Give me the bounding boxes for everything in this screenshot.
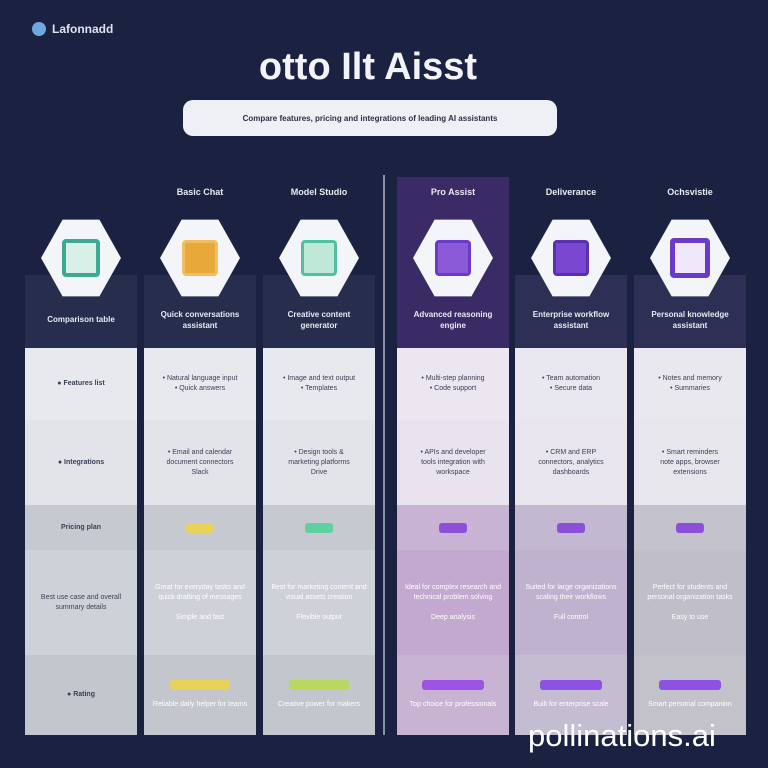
column 2 — [263, 187, 375, 735]
title: otto Ilt Aisst — [259, 46, 477, 88]
column 5 — [634, 187, 746, 735]
text: Comparison table — [47, 315, 115, 324]
column 1 — [144, 187, 256, 735]
text: Pricing plan — [61, 524, 101, 530]
text: Perfect for students and personal organization tasks — [647, 584, 733, 600]
text: • Email and calendar — [168, 448, 232, 456]
text: Easy to use — [672, 614, 708, 620]
text: • CRM and ERP — [546, 448, 596, 456]
text: Suited for large organizations scaling their workflows — [525, 584, 617, 600]
purple header block col3 — [397, 177, 509, 348]
text: • Team automation — [542, 375, 600, 382]
text: Ochsvistie — [667, 187, 713, 197]
text: • Image and text output — [283, 375, 355, 382]
text: ● Features list — [57, 380, 105, 387]
text: Smart personal companion — [648, 701, 732, 708]
text: • Natural language input — [163, 375, 237, 382]
text: Best for marketing content and visual assets creation — [271, 584, 367, 600]
text: Creative power for makers — [278, 701, 360, 708]
text: • Secure data — [550, 385, 592, 392]
text: Built for enterprise scale — [533, 701, 609, 708]
column 4 — [515, 187, 627, 735]
divider — [383, 175, 385, 735]
text: marketing platforms — [288, 458, 350, 466]
text: Simple and fast — [176, 614, 224, 620]
text: dashboards — [553, 468, 589, 476]
text: Creative content generator — [288, 310, 350, 330]
text: Slack — [191, 468, 209, 476]
text: • Summaries — [670, 385, 710, 392]
text: extensions — [673, 468, 707, 476]
text: Pro Assist — [431, 187, 475, 197]
text: Quick conversations assistant — [161, 310, 239, 330]
watermark: pollinations.ai — [528, 718, 716, 753]
text: Reliable daily helper for teams — [153, 701, 247, 708]
text: Deliverance — [546, 187, 596, 197]
text: • Smart reminders — [662, 448, 718, 456]
text: Full control — [554, 614, 588, 620]
column 0: row labels — [25, 220, 137, 735]
text: Deep analysis — [431, 614, 475, 620]
text: Personal knowledge assistant — [651, 310, 729, 330]
text: ● Rating — [67, 691, 95, 698]
text: Great for everyday tasks and quick drafting of messages — [155, 584, 245, 600]
subtitle pill — [183, 100, 557, 136]
text: workspace — [436, 468, 470, 476]
text: ● Integrations — [58, 458, 104, 466]
text: document connectors — [167, 458, 233, 466]
text: Best use case and overall summary details — [41, 594, 121, 610]
text: connectors, analytics — [538, 458, 604, 466]
logo: Lafonnadd — [52, 22, 113, 36]
column 3 — [397, 187, 509, 735]
text: Ideal for complex research and technical problem solving — [405, 584, 501, 600]
text: Top choice for professionals — [410, 701, 496, 708]
text: • Code support — [430, 385, 476, 392]
text: Basic Chat — [177, 187, 223, 197]
text: • Design tools & — [294, 448, 344, 456]
subtitle pill: Compare features, pricing and integrations of leading AI assistants — [243, 114, 497, 122]
text: Model Studio — [291, 187, 347, 197]
text: Flexible output — [296, 614, 342, 620]
text: tools integration with — [421, 458, 485, 466]
text: Enterprise workflow assistant — [533, 310, 609, 330]
text: • APIs and developer — [420, 448, 486, 456]
text: • Templates — [301, 385, 337, 392]
text: note apps, browser — [660, 458, 720, 466]
text: Drive — [311, 468, 327, 476]
text: • Multi-step planning — [421, 375, 485, 382]
text: • Quick answers — [175, 385, 225, 392]
text: Advanced reasoning engine — [414, 310, 492, 330]
text: • Notes and memory — [658, 375, 722, 382]
